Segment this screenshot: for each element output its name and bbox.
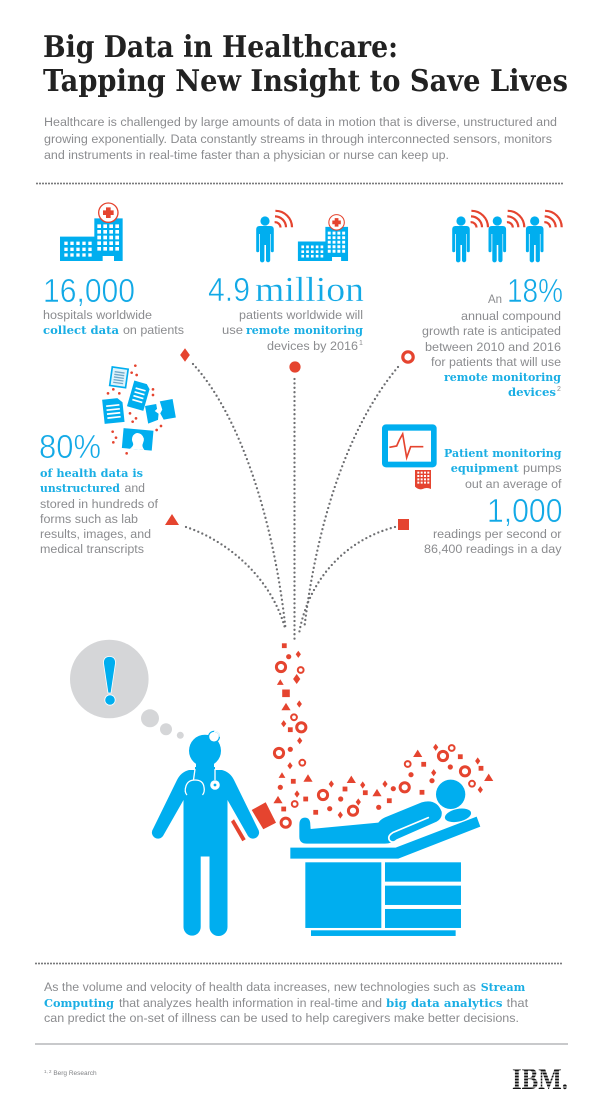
remote monitoring text: [222, 308, 363, 353]
growth text: between 2010 and 2016: [425, 340, 561, 354]
stat: An 18%: 18%: [507, 272, 563, 309]
equipment text: pumps: [523, 461, 562, 475]
footnote: Berg Research: [52, 1070, 97, 1077]
growth text: remote monitoring: [444, 370, 561, 384]
equipment text: [444, 446, 562, 491]
marker: diamond: [180, 348, 190, 362]
stat: 1,000: 1,000: [487, 492, 562, 529]
icon: red clipboard: [231, 802, 276, 841]
hospitals text: collect data: [43, 323, 119, 337]
panel: growth rate: [422, 211, 563, 399]
intro text: [44, 115, 557, 162]
marker: ring: [403, 352, 413, 362]
unstructured text: [40, 466, 159, 556]
growth text: devices: [508, 385, 556, 399]
marker: square: [398, 519, 409, 530]
closing text: As the volume and velocity of health data increases, new technologies such as: [44, 980, 476, 994]
panel: patient monitoring equipment: [382, 424, 562, 556]
title: Big Data in Healthcare:: [43, 30, 398, 65]
readings text: 86,400 readings in a day: [424, 542, 562, 556]
exam table: [290, 817, 480, 936]
stat: 16,000: 16,000: [43, 272, 135, 309]
unstructured text: medical transcripts: [40, 542, 144, 556]
intro text: and instruments in real-time faster than a physician or nurse can keep up.: [44, 148, 449, 162]
unstructured text: results, images, and: [40, 527, 151, 541]
readings text: [424, 527, 562, 556]
icon: small hospital: [298, 215, 348, 261]
closing text: [44, 980, 529, 1025]
icon: three people with signals: [452, 211, 562, 262]
stat: An 18%: An: [488, 292, 502, 306]
unstructured text: stored in hundreds of: [40, 497, 159, 511]
icon: scattered documents: [102, 364, 176, 455]
unstructured text: of health data is: [40, 466, 143, 480]
remote monitoring text: use: [222, 323, 243, 337]
panel: hospitals: [43, 203, 184, 337]
remote monitoring text: 1: [359, 340, 363, 347]
panel: remote monitoring patients: [208, 211, 364, 353]
stat: 4.9 million: [208, 270, 364, 309]
unstructured text: unstructured: [40, 481, 120, 495]
thought bubble: [70, 640, 184, 739]
growth text: growth rate is anticipated: [422, 324, 561, 338]
marker: triangle: [165, 514, 179, 525]
closing text: Stream: [481, 980, 525, 994]
patient on exam table: [290, 780, 480, 936]
equipment text: out an average of: [465, 477, 562, 491]
remote monitoring text: patients worldwide will: [239, 308, 363, 322]
closing text: Computing: [44, 996, 114, 1010]
closing text: that analyzes health information in real-time and: [119, 996, 382, 1010]
hospitals text: on patients: [123, 323, 184, 337]
intro text: growing exponentially. Data constantly streams in through interconnected sensors, monitors: [44, 132, 552, 146]
unstructured text: and: [124, 481, 145, 495]
stat: 80%: 80%: [39, 428, 101, 465]
hospitals text: [43, 308, 184, 337]
hospitals text: hospitals worldwide: [43, 308, 152, 322]
closing text: can predict the on-set of illness can be used to help caregivers make better decisions.: [44, 1011, 519, 1025]
footnote: 1, 2: [44, 1069, 52, 1074]
closing text: big data analytics: [386, 996, 503, 1010]
icon: hospital: [60, 203, 123, 261]
icon: person with signal: [256, 211, 292, 262]
patient body: [299, 780, 472, 844]
stat: 4.9 million: million: [255, 270, 364, 309]
title: [43, 30, 568, 99]
icon: monitor with printout: [382, 424, 437, 489]
equipment text: equipment: [451, 461, 519, 475]
growth text: 2: [557, 386, 561, 393]
intro text: Healthcare is challenged by large amounts of data in motion that is diverse, unstructured and: [44, 115, 557, 129]
marker: circle: [289, 361, 301, 373]
closing text: that: [507, 996, 529, 1010]
readings text: readings per second or: [433, 527, 562, 541]
IBM logo: IBM.: [512, 1061, 568, 1096]
growth text: annual compound: [461, 309, 561, 323]
stethoscope: [185, 769, 220, 795]
icon: exclamation mark: [104, 656, 116, 705]
remote monitoring text: remote monitoring: [246, 323, 363, 337]
panel: unstructured data: [39, 364, 176, 556]
growth text: for patients that will use: [431, 355, 561, 369]
unstructured text: forms such as lab: [40, 512, 138, 526]
dotted lines fanning out from data stream: [186, 364, 398, 640]
growth text: [422, 309, 561, 399]
remote monitoring text: devices by 2016: [267, 339, 358, 353]
stat: 4.9 million: 4.9: [208, 271, 250, 308]
data particles stream: [273, 643, 493, 827]
doctor: [152, 731, 259, 936]
equipment text: Patient monitoring: [444, 446, 562, 460]
stat: An 18%: [488, 272, 563, 309]
